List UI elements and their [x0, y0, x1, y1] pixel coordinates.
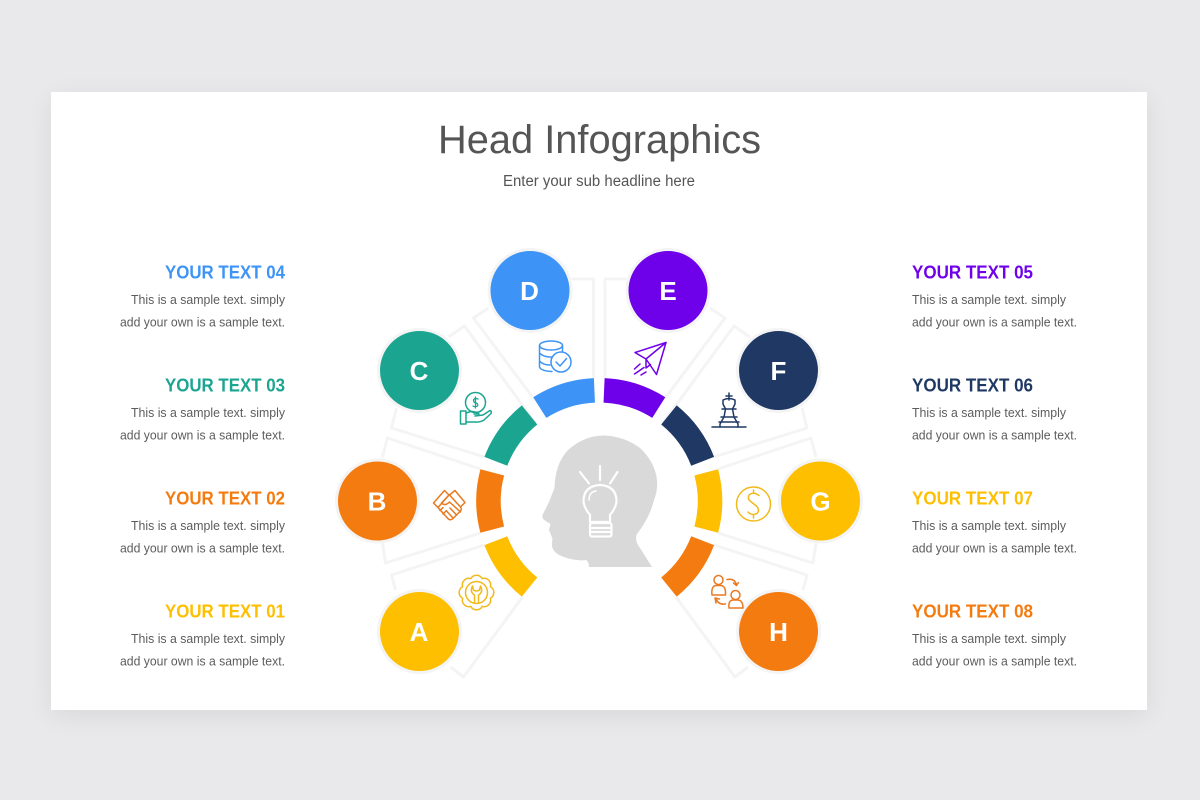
icon: hand holding coin: [460, 392, 491, 424]
ring segments: [476, 378, 722, 597]
text block: 07: [912, 488, 1077, 556]
circle G: G: [810, 486, 831, 516]
circle F: [738, 330, 820, 412]
circle E: E: [659, 276, 677, 306]
text block: 02: add your own is a sample text.: [120, 542, 285, 556]
text block: 01: [120, 602, 286, 668]
text block: 05: add your own is a sample text.: [912, 316, 1077, 330]
text block: 06: [912, 376, 1077, 442]
circle G: [780, 460, 862, 542]
text block: 08: [912, 602, 1077, 668]
text block: 04: This is a sample text. simply: [131, 293, 286, 307]
icon: handshake: [434, 490, 465, 520]
icon: gear with wrench: [459, 575, 494, 610]
text block: 08: YOUR TEXT 08: [912, 602, 1033, 622]
circle D: D: [520, 276, 539, 306]
text block: 02: [120, 488, 286, 556]
text block: 03: This is a sample text. simply: [131, 406, 286, 420]
icon: people exchange: [712, 576, 743, 608]
icon: light bulb: [580, 466, 618, 536]
panel: white card background: [51, 92, 1147, 710]
text block: 03: [120, 376, 286, 442]
icon: database with check: [540, 341, 571, 372]
text block: 04: YOUR TEXT 04: [165, 262, 285, 282]
icon: paper plane: [634, 342, 666, 375]
text block: 05: YOUR TEXT 05: [912, 262, 1033, 282]
wedge panel outlines: [382, 279, 816, 677]
text block: 06: add your own is a sample text.: [912, 428, 1077, 442]
text block: 06: YOUR TEXT 06: [912, 376, 1033, 396]
text block: 07: add your own is a sample text.: [912, 542, 1077, 556]
text block: 05: This is a sample text. simply: [912, 293, 1067, 307]
circle A: A: [410, 617, 429, 647]
text block: 08: This is a sample text. simply: [912, 632, 1067, 646]
text block: 02: YOUR TEXT 02: [165, 488, 285, 508]
circle E: [627, 250, 709, 332]
circle C: C: [410, 356, 429, 386]
circle D: [489, 250, 571, 332]
text block: 05: [912, 262, 1077, 330]
text block: 07: YOUR TEXT 07: [912, 488, 1033, 508]
text block: 01: This is a sample text. simply: [131, 632, 286, 646]
circle B: [336, 460, 418, 542]
text block: 02: This is a sample text. simply: [131, 519, 286, 533]
text block: 01: add your own is a sample text.: [120, 654, 285, 668]
text block: 01: YOUR TEXT 01: [165, 602, 285, 622]
text block: 04: add your own is a sample text.: [120, 316, 285, 330]
icon: dollar coin: [736, 487, 770, 521]
text block: 03: YOUR TEXT 03: [165, 376, 285, 396]
circle F: F: [771, 356, 786, 386]
text block: 08: add your own is a sample text.: [912, 654, 1077, 668]
subtitle: Enter your sub headline here: [503, 173, 695, 190]
icon: chess king: [712, 393, 746, 427]
head silhouette with light bulb: [542, 436, 657, 567]
circle B: B: [368, 486, 386, 516]
text block: 04: [120, 262, 286, 330]
text block: 06: This is a sample text. simply: [912, 406, 1067, 420]
circle H: H: [769, 617, 788, 647]
head shape: [542, 436, 657, 567]
title: Head Infographics: [438, 118, 761, 162]
text block: 07: This is a sample text. simply: [912, 519, 1067, 533]
circle C: [378, 330, 460, 412]
circle A: [378, 590, 460, 672]
circle H: [738, 590, 820, 672]
text block: 03: add your own is a sample text.: [120, 428, 285, 442]
